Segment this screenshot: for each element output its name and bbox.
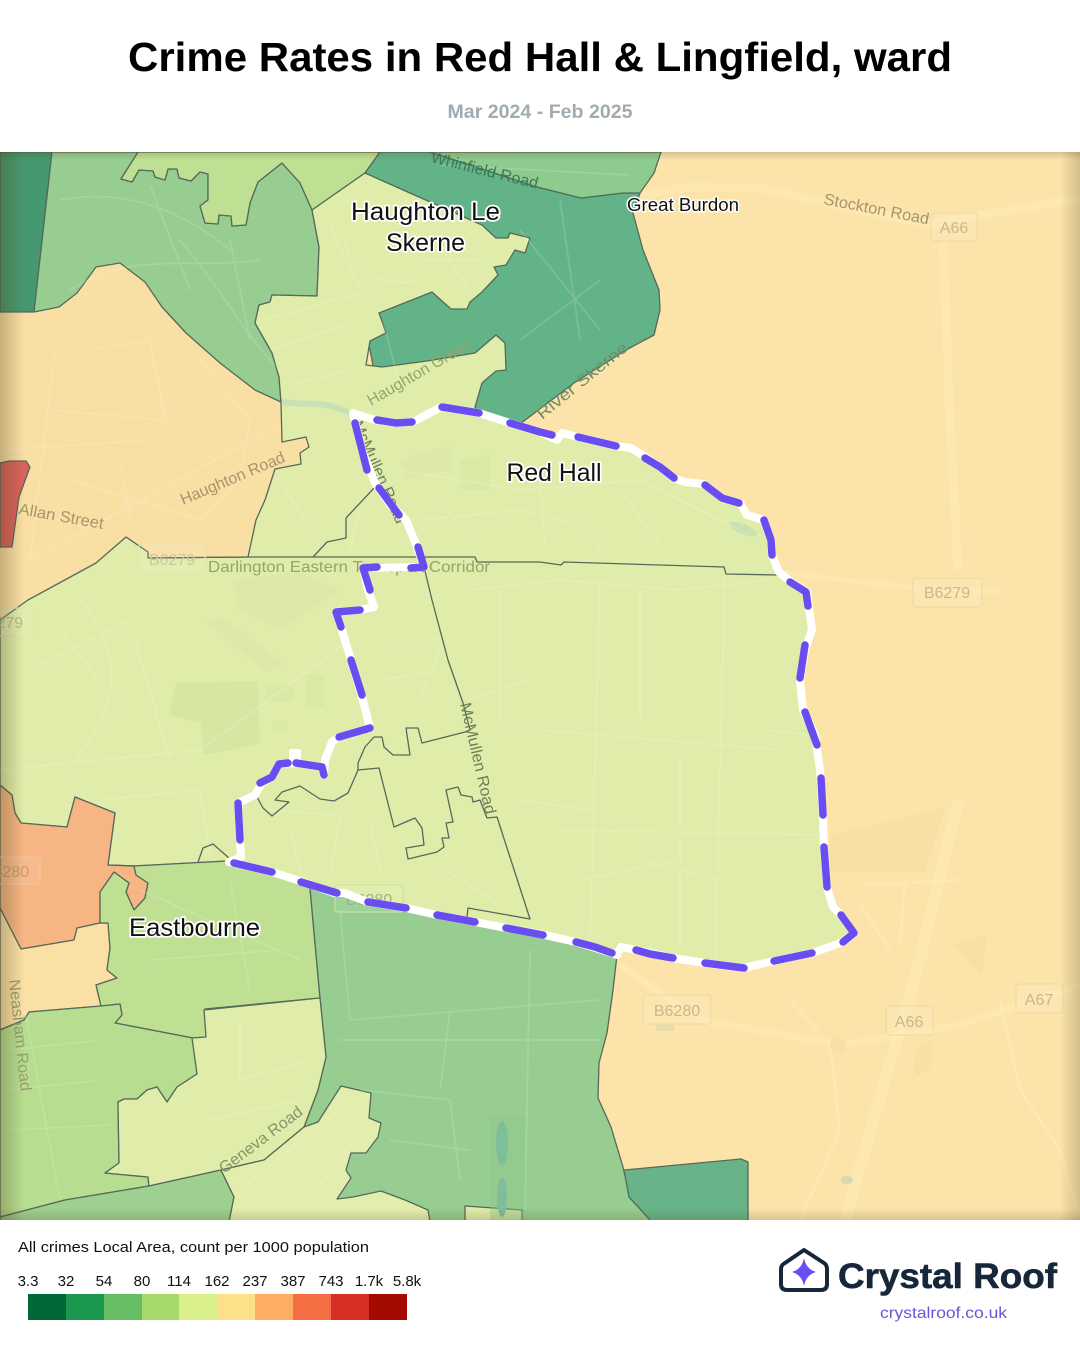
road labels: Darlington Eastern Transport Corridor <box>208 559 491 576</box>
region: Eastbourne pale green <box>96 861 320 1038</box>
road shields: B6280 <box>654 1003 700 1020</box>
road labels: McMullen Road <box>456 701 498 816</box>
road shields: A66 <box>895 1014 923 1031</box>
place labels: Red Hall <box>506 459 602 487</box>
brand name: Crystal Roof <box>838 1257 1057 1296</box>
ward boundary: purple dashes <box>234 407 854 968</box>
legend value labels: 114 <box>167 1273 191 1290</box>
region: light green small southern block <box>465 1206 522 1222</box>
ward boundary: white casing <box>229 407 854 968</box>
legend value labels: 80 <box>134 1273 150 1290</box>
choropleth map panel <box>0 149 1080 1222</box>
map vignette <box>0 152 1080 1220</box>
road shields: B6279 <box>149 552 195 569</box>
place labels <box>129 195 739 942</box>
place labels: Great Burdon <box>627 195 739 215</box>
legend value labels: 743 <box>318 1273 344 1290</box>
map area: land use patches and ponds <box>169 402 759 1220</box>
region: red hotspot <box>0 461 30 547</box>
legend value labels: 32 <box>58 1273 74 1290</box>
legend value labels <box>18 1273 422 1290</box>
region: green south-west <box>0 1004 197 1217</box>
legend value labels: 5.8k <box>393 1273 422 1290</box>
road labels: Allan Street <box>17 501 106 533</box>
region: mid green south <box>300 888 652 1222</box>
road shields: A67 <box>1025 992 1053 1009</box>
place labels: Haughton Le <box>351 198 500 226</box>
region: orange Eastbourne west <box>0 785 148 949</box>
region: central light green including ward <box>0 173 854 968</box>
road labels: McMullen Road <box>348 419 409 526</box>
road shields: B6279 <box>924 585 970 602</box>
legend value labels: 3.3 <box>18 1273 38 1290</box>
subtitle: date range: Mar 2024 - Feb 2025 <box>448 102 633 123</box>
road shields <box>0 213 1063 1035</box>
legend value labels: 237 <box>242 1273 268 1290</box>
region: dark green north-west strip <box>0 152 52 312</box>
region: green bottom-left <box>0 1170 234 1222</box>
legend value labels: 387 <box>280 1273 306 1290</box>
road labels: Stockton Road <box>822 191 931 228</box>
map area: street network <box>0 165 820 1210</box>
road shields: B6280 <box>346 892 392 909</box>
icon: house with star <box>781 1250 827 1290</box>
region: western peach area <box>0 263 309 620</box>
boundary lines: Darlington corridor ward divider <box>148 487 778 919</box>
legend value labels: 162 <box>204 1273 230 1290</box>
region: peach terrace blocks <box>0 908 117 1030</box>
legend colour scale <box>28 1294 407 1320</box>
road labels: Haughton Green <box>364 336 475 409</box>
road labels <box>5 149 931 1177</box>
website url: crystalroof.co.uk <box>880 1305 1008 1322</box>
map area: eastern land patches and roads <box>656 880 1004 1184</box>
legend <box>18 1239 422 1320</box>
road labels: Neasham Road <box>5 979 34 1092</box>
place labels: Skerne <box>386 229 465 257</box>
road shields: A66 <box>940 220 968 237</box>
road labels: Whinfield Road <box>429 149 540 192</box>
road labels: Haughton Road <box>178 449 288 509</box>
road labels: Geneva Road <box>216 1103 306 1177</box>
region: dark green south-east block <box>624 1159 748 1222</box>
legend value labels: 1.7k <box>355 1273 384 1290</box>
region: light green south centre <box>105 998 326 1186</box>
region: mid green Whinfield <box>430 152 661 198</box>
legend title: All crimes Local Area, count per 1000 population <box>18 1239 369 1256</box>
road labels: River Skerne <box>534 339 632 423</box>
legend value labels: 54 <box>96 1273 112 1290</box>
region: pale green north <box>121 152 380 226</box>
region: mid green north-west <box>34 152 319 402</box>
place labels: Eastbourne <box>129 914 260 942</box>
region: light green bottom centre <box>221 1086 430 1222</box>
logo: Crystal Roof <box>781 1250 1057 1322</box>
title: Crime Rates in Red Hall & Lingfield, ward <box>128 34 952 80</box>
region: dark green Haughton east <box>360 152 660 424</box>
